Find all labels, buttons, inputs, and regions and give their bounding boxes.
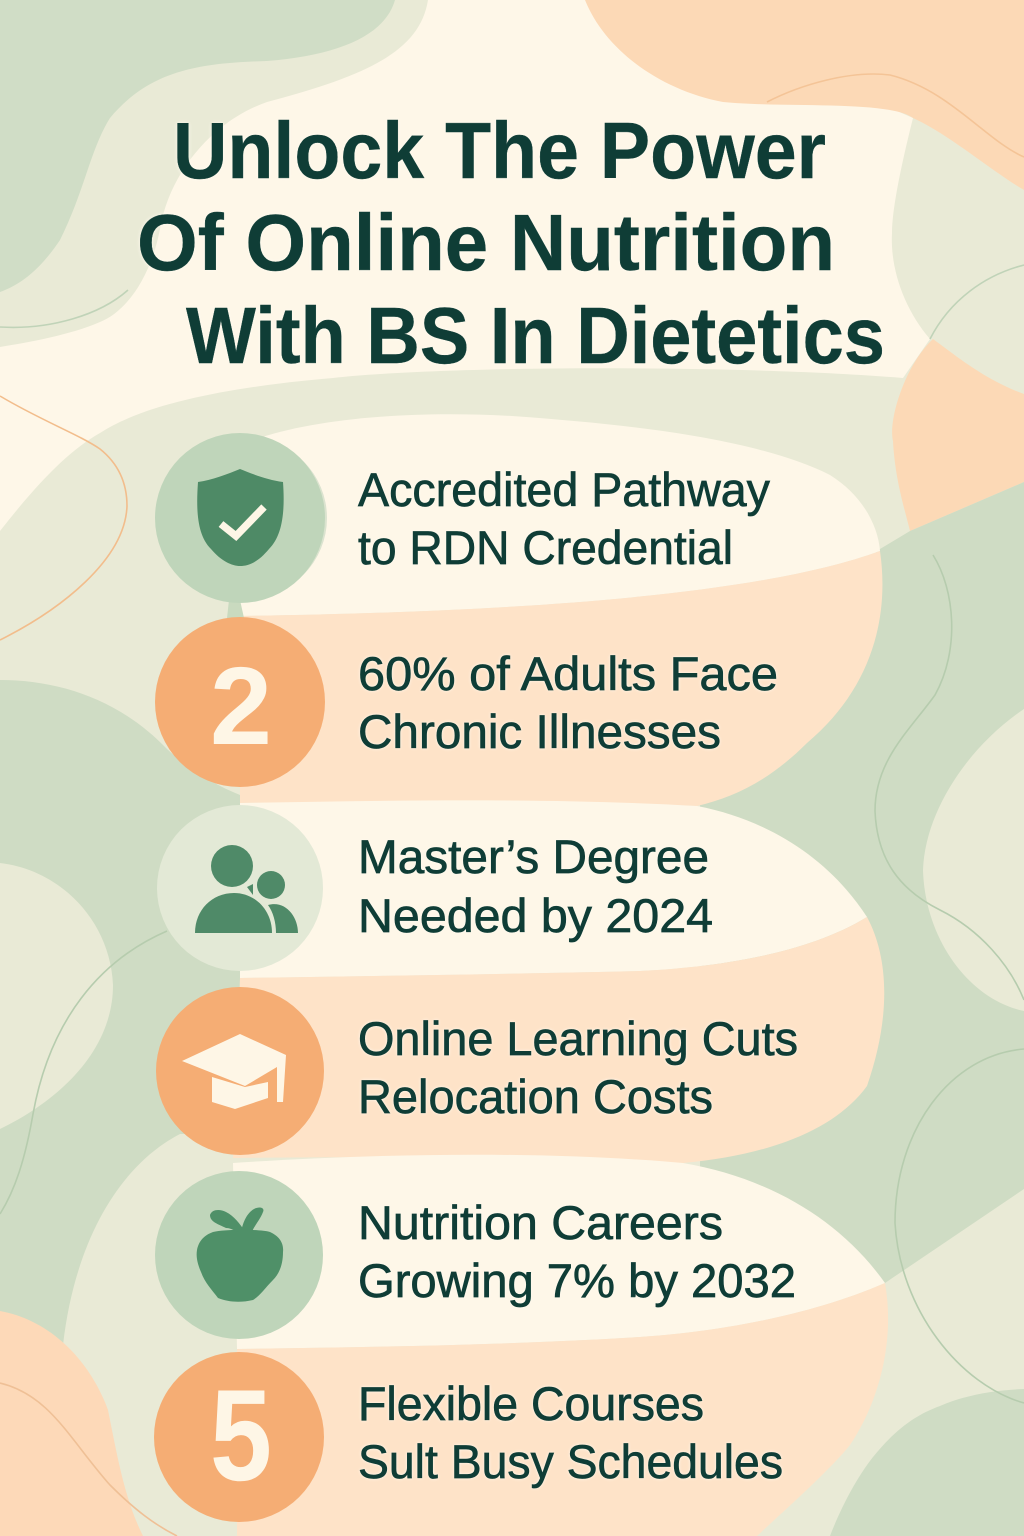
connector between items 1 and 2 — [227, 600, 244, 618]
row bands — [233, 414, 888, 1536]
icon: apple — [197, 1208, 283, 1302]
item 5: nutrition careers — [155, 1171, 796, 1339]
icon: people — [195, 845, 298, 933]
title: Unlock The Power — [173, 106, 826, 195]
item 1: accredited pathway: Accredited Pathway — [358, 463, 770, 516]
icon: graduation cap — [182, 1034, 286, 1109]
item 1: accredited pathway — [155, 433, 770, 603]
item 6: flexible courses — [154, 1352, 783, 1522]
title — [137, 106, 885, 380]
icon: number 2: 2 — [210, 645, 272, 768]
icon: number 5: 5 — [210, 1362, 272, 1508]
item 6: flexible courses: Flexible Courses — [358, 1377, 704, 1430]
title: Of Online Nutrition — [137, 198, 835, 287]
item 5: nutrition careers: Nutrition Careers — [358, 1196, 723, 1249]
item 2: chronic illnesses: Chronic Illnesses — [358, 705, 721, 758]
item 4: online learning: Online Learning Cuts — [358, 1012, 798, 1065]
item 3: master's degree — [157, 805, 713, 971]
item 4: online learning — [156, 987, 798, 1155]
item 3: master's degree: Needed by 2024 — [358, 889, 713, 942]
icon: shield with check — [197, 469, 284, 566]
item 2: chronic illnesses: 60% of Adults Face — [358, 647, 778, 700]
item 6: flexible courses: Sult Busy Schedules — [358, 1435, 783, 1488]
item 5: nutrition careers: Growing 7% by 2032 — [358, 1254, 796, 1307]
item 1: accredited pathway: to RDN Credential — [358, 521, 733, 574]
item 3: master's degree: Master’s Degree — [358, 830, 709, 883]
item 4: online learning: Relocation Costs — [358, 1070, 713, 1123]
item 2: chronic illnesses — [155, 617, 778, 787]
title: With BS In Dietetics — [186, 291, 885, 380]
